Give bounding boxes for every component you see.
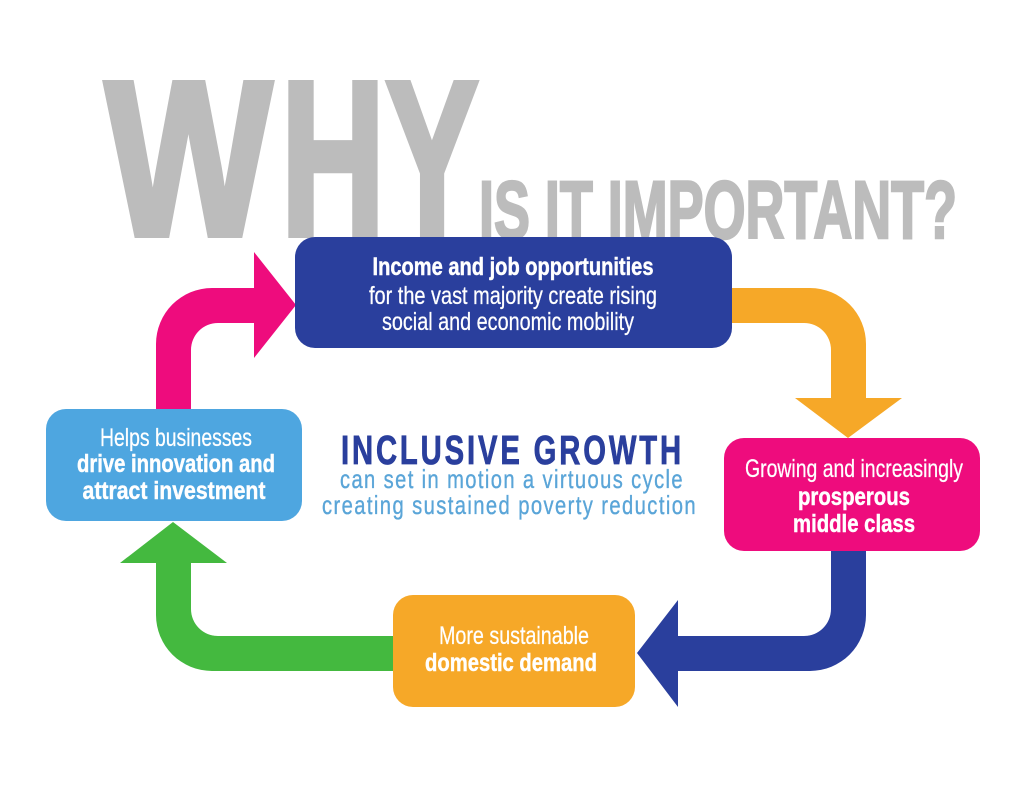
title letter: W: W [106,36,272,282]
panel text: Helps businesses [100,424,252,452]
arrow: pink, light blue box to top box [156,252,296,415]
panel text: More sustainable [439,622,589,650]
center heading: INCLUSIVE GROWTH [341,427,684,473]
title letter: Y: Y [386,36,478,282]
title [106,36,957,282]
arrow: blue, pink box to orange box [637,545,866,707]
panel: prosperous middle class [724,438,980,551]
title letter: H: H [281,36,385,282]
arrow: green, orange box to light blue box [120,522,400,671]
panel emphasis line 1: drive innovation and [77,450,275,478]
panel emphasis line 1: prosperous [798,483,910,511]
arrow: orange, top box to pink box [725,288,902,438]
panel emphasis: domestic demand [425,649,597,677]
panel: drive innovation [46,409,302,521]
center line 2: creating sustained poverty reduction [322,490,697,520]
panel emphasis line 2: attract investment [82,477,266,505]
panel text line 2: social and economic mobility [382,308,634,336]
panel heading: Income and job opportunities [372,253,654,281]
panel: income and job opportunities [295,237,732,348]
panel: domestic demand [393,595,635,707]
panel text: Growing and increasingly [745,455,963,483]
center text [322,427,697,520]
panel text line 1: for the vast majority create rising [369,282,657,310]
panel emphasis line 2: middle class [793,510,915,538]
center line 1: can set in motion a virtuous cycle [340,464,684,494]
